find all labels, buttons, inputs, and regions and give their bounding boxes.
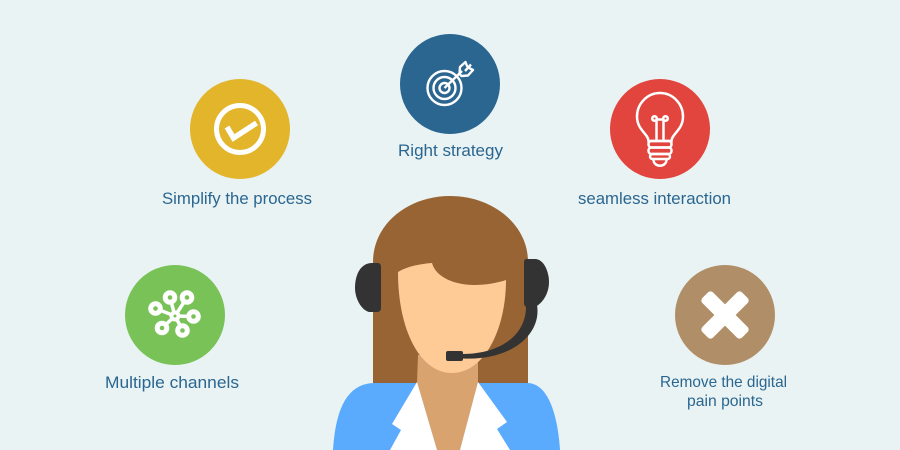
label: simplify the process: Simplify the process	[162, 189, 312, 208]
right ear cup	[524, 259, 549, 307]
neck	[417, 355, 478, 450]
headset	[355, 259, 549, 361]
icon: network nodes in green circle	[125, 265, 225, 365]
item: simplify the process	[162, 79, 312, 208]
left ear cup	[355, 263, 381, 312]
icon: cross in tan circle	[675, 265, 775, 365]
agent figure with headset	[333, 196, 560, 450]
item: remove the digital pain points: pain points	[687, 393, 763, 410]
label: right strategy: Right strategy	[398, 141, 503, 160]
item: right strategy	[398, 34, 503, 160]
icon: check mark in yellow circle	[190, 79, 290, 179]
boom arm	[463, 305, 538, 359]
item: seamless interaction	[578, 79, 731, 208]
jacket	[333, 383, 560, 450]
collar	[390, 382, 510, 450]
icon: light bulb in red circle	[610, 79, 710, 179]
item: multiple channels	[105, 265, 239, 392]
face	[398, 263, 506, 373]
label: remove the digital pain points: Remove the digital	[660, 374, 787, 391]
label: multiple channels: Multiple channels	[105, 373, 239, 392]
hair	[373, 196, 528, 383]
icon: target and arrow in blue circle	[400, 34, 500, 134]
label: seamless interaction: seamless interaction	[578, 189, 731, 208]
microphone	[446, 351, 463, 361]
item: remove the digital pain points	[660, 265, 787, 410]
